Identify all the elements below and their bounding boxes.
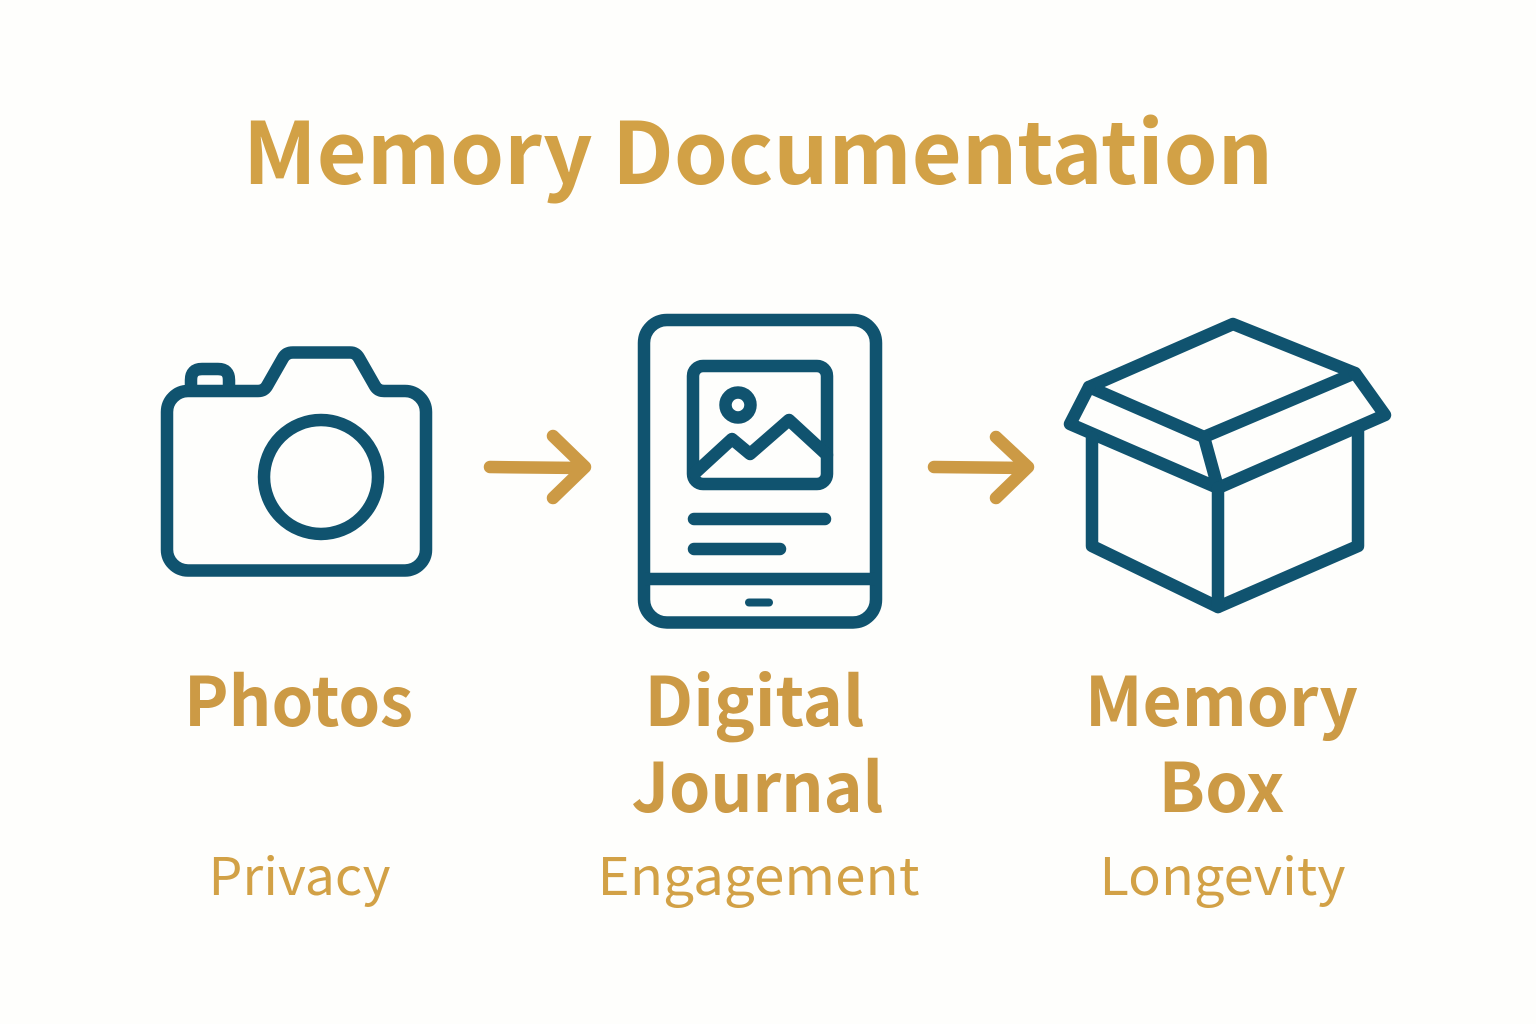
label: memory box	[1085, 647, 1358, 832]
label: memory box: Box	[1158, 733, 1284, 832]
label: digital journal: Journal	[632, 733, 884, 832]
caption: engagement: Engagement	[598, 835, 920, 910]
title: Memory Documentation	[243, 84, 1273, 209]
icon: camera	[167, 352, 426, 571]
label: photos: Photos	[184, 647, 413, 746]
arrow: journal to box	[934, 437, 1028, 498]
label: memory box: Memory	[1085, 647, 1358, 746]
caption: longevity: Longevity	[1100, 835, 1346, 910]
label: digital journal: Digital	[644, 647, 864, 746]
caption: privacy: Privacy	[208, 835, 390, 910]
icon: digital journal tablet	[644, 320, 876, 622]
arrow: photos to journal	[490, 436, 585, 498]
icon: memory box	[1070, 324, 1385, 607]
label: digital journal	[632, 647, 884, 832]
